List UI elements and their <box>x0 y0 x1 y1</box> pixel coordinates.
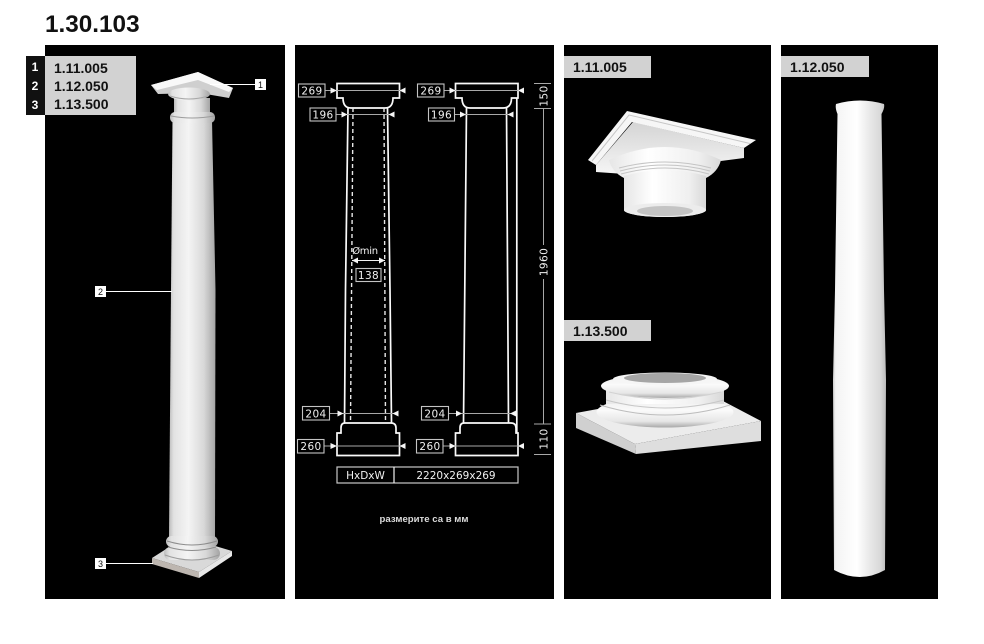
callout 1 <box>210 79 266 90</box>
dimension: inner diameter: 138 <box>358 270 379 282</box>
dimension: 269 left: 269 <box>301 86 323 98</box>
panel: assembled column <box>45 45 285 599</box>
column base <box>152 536 232 578</box>
legend: part numbers: 2 <box>32 79 39 93</box>
dimension: 204 left: 204 <box>305 408 327 420</box>
legend: part numbers: 1 <box>32 60 39 74</box>
shaft render <box>833 100 886 577</box>
dimension: 196 left <box>310 108 394 122</box>
dimension: 269 left <box>298 84 406 98</box>
dimension: 260 left: 260 <box>300 441 322 453</box>
dimension: 260 right: 260 <box>419 441 441 453</box>
size table: 2220x269x269 <box>416 470 496 482</box>
callout 2 <box>95 286 172 297</box>
legend: part numbers: 3 <box>32 98 39 112</box>
panel: shaft detail <box>781 45 938 599</box>
dimension: inner diameter <box>352 245 385 282</box>
callout 3 <box>95 558 153 569</box>
legend: part numbers: 1.11.005 <box>54 60 108 76</box>
drawing: side view <box>456 84 518 456</box>
label 1.12.050: 1.12.050 <box>790 59 845 75</box>
dimension: 269 right <box>418 84 524 98</box>
dimension: inner diameter: Ømin <box>352 245 378 257</box>
dimension: 196 right: 196 <box>431 110 452 122</box>
label 1.11.005 <box>564 56 651 78</box>
label 1.11.005: 1.11.005 <box>573 59 627 75</box>
dimension: 204 left <box>302 406 398 420</box>
column capital <box>151 72 233 123</box>
dimension: 204 right <box>422 406 516 420</box>
dimension: 260 left <box>298 440 406 453</box>
dimension: 196 left: 196 <box>312 110 334 122</box>
units note: размерите са в мм <box>380 514 468 525</box>
dimension: 260 right <box>416 440 524 453</box>
dimension: heights: 150 <box>538 85 550 107</box>
dimension: 269 right: 269 <box>420 86 442 98</box>
label 1.13.500 <box>564 320 651 341</box>
panel: capital and base details <box>564 45 771 599</box>
panel: dimension drawing <box>295 45 554 599</box>
legend: part numbers: 1.12.050 <box>54 78 109 94</box>
label 1.13.500: 1.13.500 <box>573 323 628 339</box>
dimension: heights: 1960 <box>538 248 550 276</box>
base render <box>576 372 761 454</box>
dimension: heights: 110 <box>538 428 550 450</box>
title: 1.30.103 <box>45 11 140 38</box>
callout 1: 1 <box>258 80 263 90</box>
column shaft <box>169 120 216 540</box>
drawing: section view <box>337 84 400 456</box>
callout 3: 3 <box>98 559 103 569</box>
dimension: 204 right: 204 <box>424 408 446 420</box>
legend: part numbers <box>26 56 136 115</box>
label 1.12.050 <box>781 56 869 77</box>
dimension: 196 right <box>428 108 514 122</box>
dimension: heights <box>534 84 551 454</box>
legend: part numbers: 1.13.500 <box>54 96 109 112</box>
callout 2: 2 <box>98 287 103 297</box>
capital render <box>588 111 756 217</box>
size table <box>337 467 518 483</box>
size table: HxDxW <box>346 470 386 482</box>
